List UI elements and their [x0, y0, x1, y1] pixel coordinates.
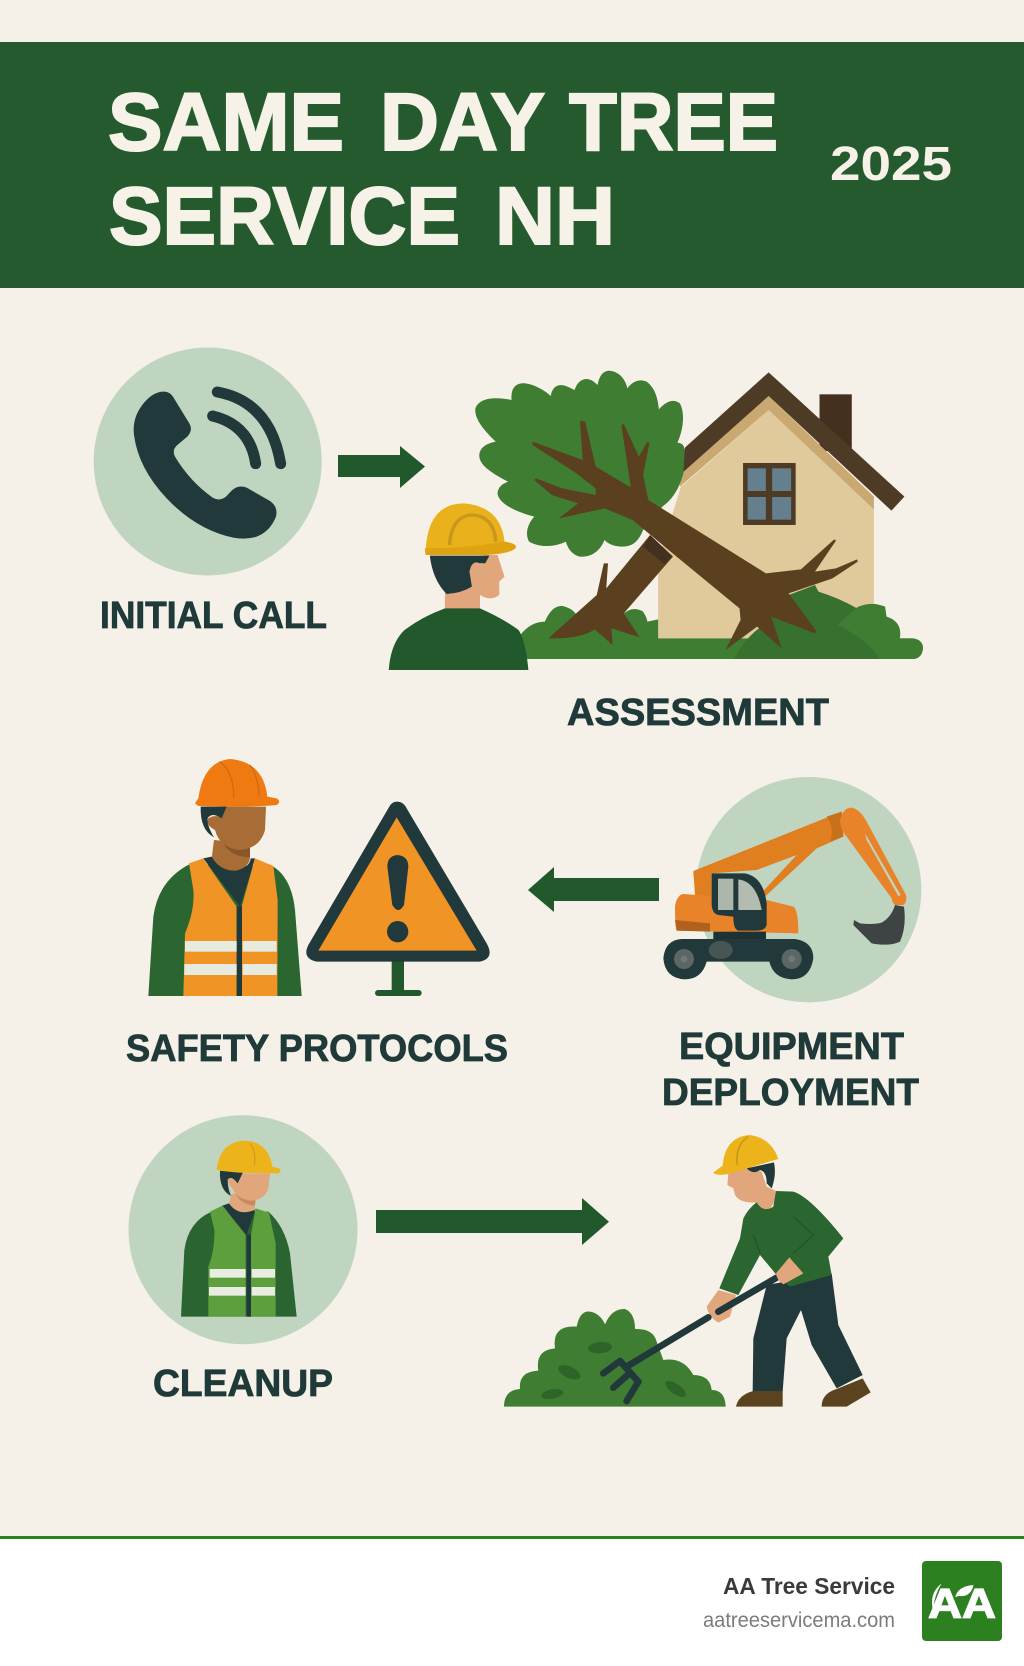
- website: aatreeservicema.com: [703, 1609, 895, 1632]
- title: SERVICE: [109, 171, 460, 262]
- logo: AA: [928, 1580, 996, 1627]
- icon: phone in circle: [94, 348, 322, 576]
- step: assessment: [389, 371, 923, 734]
- step: initial call: [94, 348, 327, 637]
- arrow: equipment to safety: [528, 867, 659, 912]
- illustration: worker raking debris: [504, 1135, 871, 1407]
- label: equipment deployment: [662, 1026, 919, 1114]
- brand name: AA Tree Service: [723, 1573, 895, 1599]
- title: [108, 77, 778, 262]
- icon: raking worker: [603, 1135, 871, 1407]
- icon: assessor worker: [389, 503, 528, 670]
- step: safety protocols: [126, 759, 508, 1070]
- icon: excavator in circle: [663, 777, 921, 1002]
- icon: warning sign: [306, 802, 490, 996]
- icon: safety worker in orange vest: [148, 759, 302, 996]
- arrow: call to assessment: [338, 446, 425, 488]
- logo: [922, 1561, 1002, 1641]
- year: 2025: [830, 138, 952, 191]
- label: assessment: ASSESSMENT: [567, 692, 829, 734]
- title: NH: [495, 171, 615, 262]
- illustration: fallen tree on house: [475, 371, 923, 659]
- label: equipment deployment: DEPLOYMENT: [662, 1072, 919, 1114]
- footer: [0, 1536, 1024, 1666]
- step: cleanup: [128, 1115, 358, 1405]
- label: cleanup: CLEANUP: [153, 1363, 333, 1405]
- title: TREE: [569, 77, 778, 168]
- arrow: cleanup: [376, 1198, 609, 1245]
- title: SAME: [108, 77, 344, 168]
- icon: debris pile: [504, 1309, 726, 1407]
- icon: worker in green vest in circle: [128, 1115, 358, 1344]
- label: equipment deployment: EQUIPMENT: [679, 1026, 904, 1068]
- header banner: [0, 42, 1024, 288]
- title: DAY: [380, 77, 545, 168]
- label: safety protocols: SAFETY PROTOCOLS: [126, 1028, 508, 1070]
- step: equipment deployment: [662, 777, 921, 1114]
- label: initial call: INITIAL CALL: [100, 595, 327, 637]
